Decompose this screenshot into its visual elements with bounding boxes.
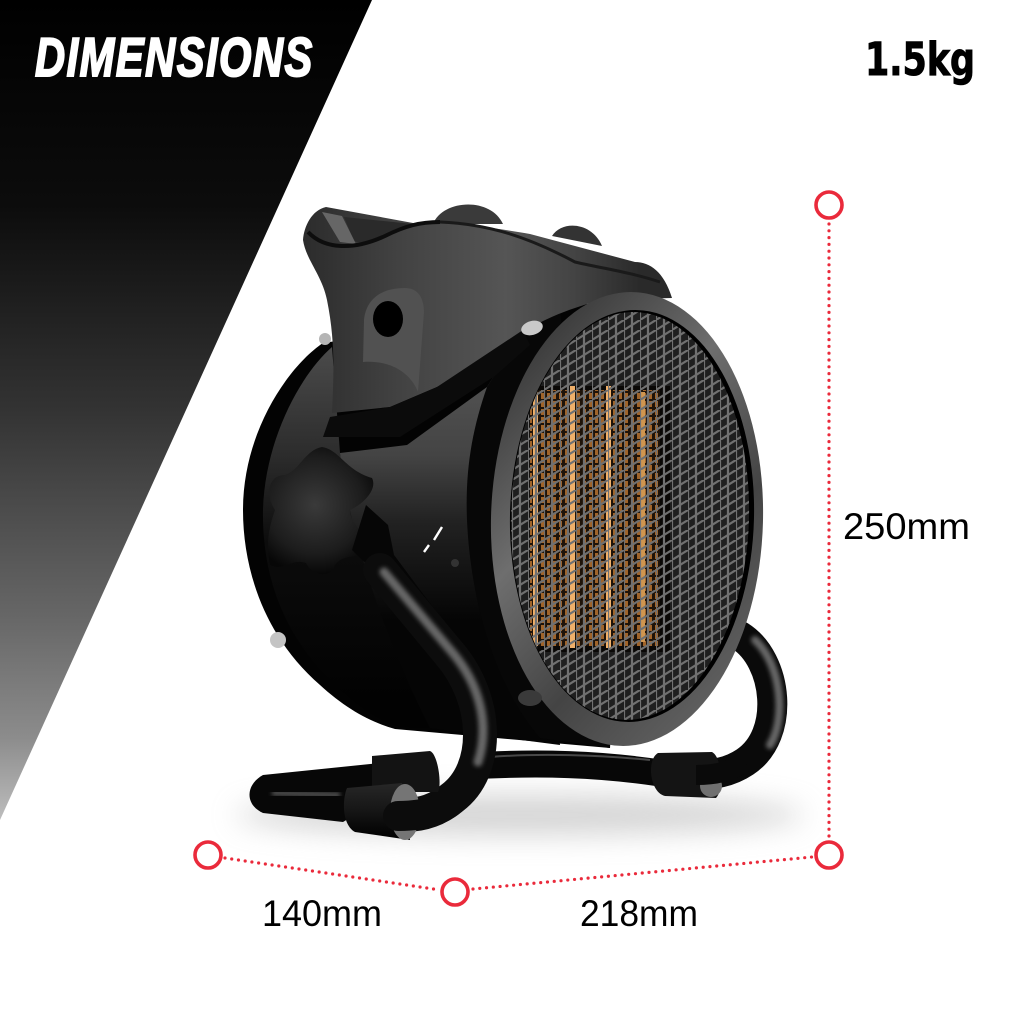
- title: DIMENSIONS: [35, 28, 314, 88]
- side panel: [340, 335, 560, 745]
- strap screw: [520, 318, 544, 338]
- top knobs: [433, 204, 602, 246]
- black strap: [323, 330, 530, 437]
- grille background: [511, 312, 749, 720]
- black band beside rim: [467, 310, 610, 748]
- front clamp: [344, 783, 466, 840]
- heater product: [243, 204, 779, 840]
- right stand arc: [690, 636, 779, 775]
- handle light strip: [322, 212, 356, 244]
- floor shadow: [235, 795, 805, 835]
- grille mesh: [510, 312, 750, 720]
- cord socket plate: [363, 288, 424, 392]
- leg tube: [380, 570, 483, 815]
- cable slot glints: [424, 527, 442, 552]
- height dimension line: [816, 192, 842, 868]
- width dimension line: [473, 857, 812, 889]
- left mount knob: [268, 447, 373, 574]
- weight label: 1.5kg: [865, 33, 975, 86]
- grille backing: [505, 307, 759, 725]
- ceramic heating element: [528, 386, 670, 652]
- vent hole: [451, 559, 459, 567]
- handle grip opening: [344, 217, 413, 242]
- handle housing: [303, 207, 672, 413]
- mesh overlay: [510, 312, 750, 720]
- rear body cylinder: [243, 296, 640, 748]
- lower dome: [518, 690, 542, 706]
- diagonal gradient corner panel: [0, 0, 372, 820]
- left top screw: [319, 333, 331, 345]
- height label: 250mm: [843, 506, 970, 547]
- grille rim: [485, 289, 769, 749]
- handle dark edge: [308, 222, 440, 246]
- depth dimension line: [195, 842, 468, 905]
- leg bracket: [352, 505, 450, 640]
- back disc: [263, 347, 470, 730]
- rear clamp: [372, 751, 440, 792]
- top surface lip: [440, 222, 660, 282]
- front stand tube: [250, 763, 380, 822]
- width label: 218mm: [580, 893, 698, 934]
- lower left screw: [270, 632, 286, 648]
- rear stand tube: [470, 755, 660, 773]
- right clamp: [651, 752, 745, 798]
- depth label: 140mm: [262, 893, 382, 934]
